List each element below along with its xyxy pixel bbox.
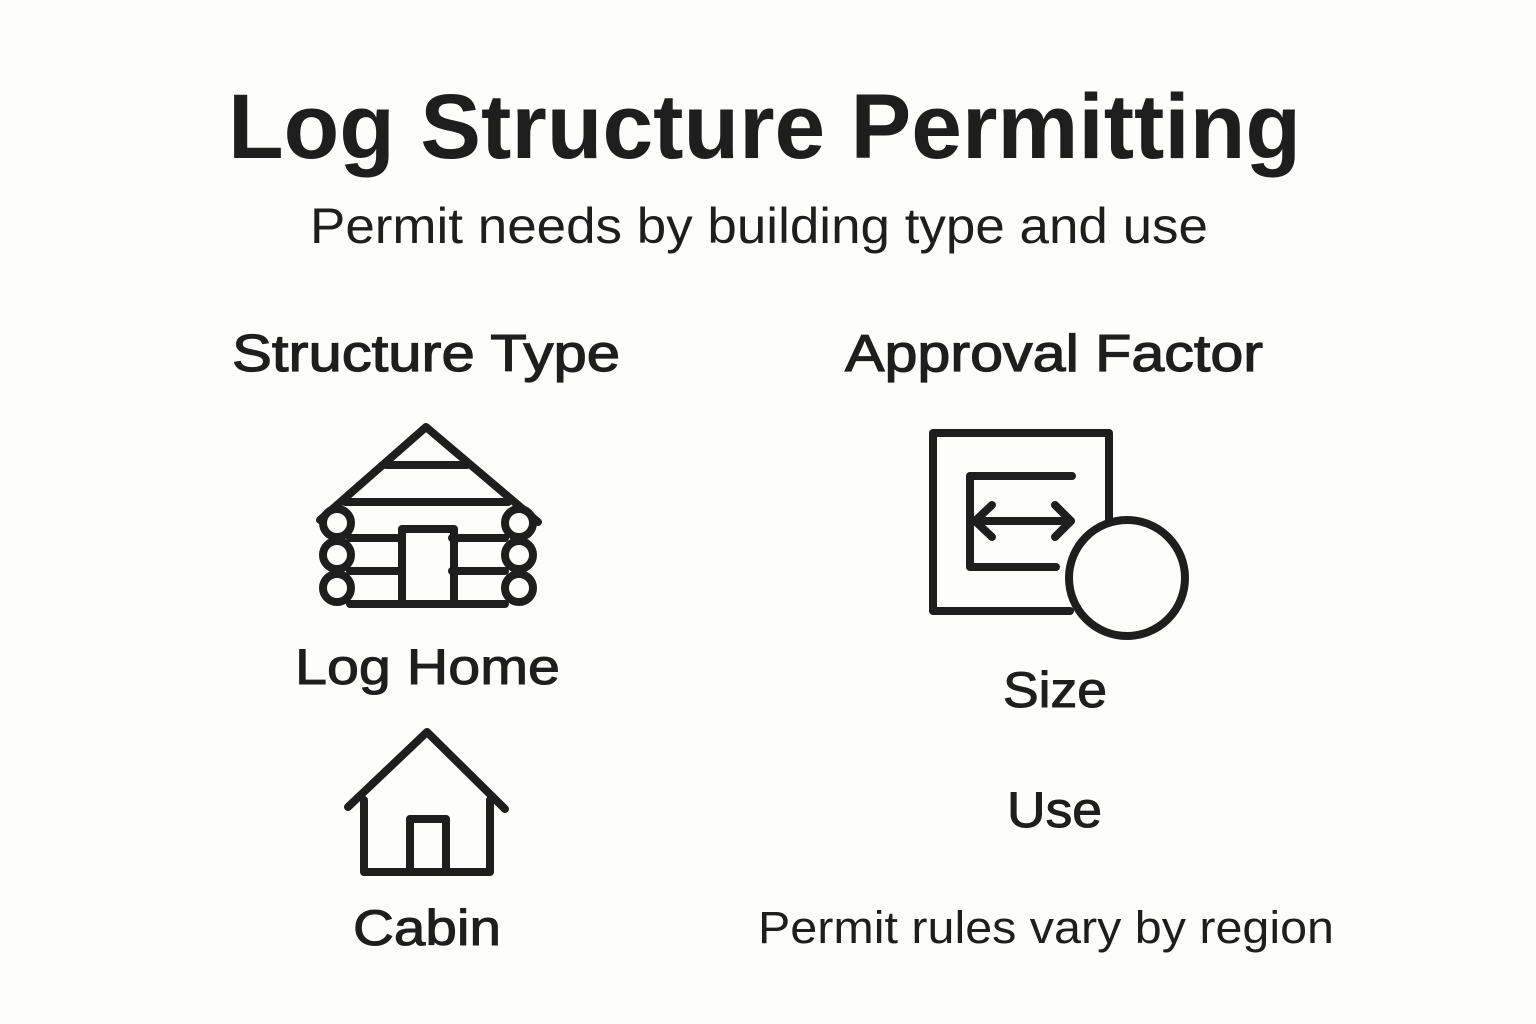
footnote: Permit rules vary by region <box>758 902 1334 953</box>
icon: log home <box>320 427 538 604</box>
subtitle: Permit needs by building type and use <box>310 198 1208 254</box>
label: use: Use <box>1007 782 1102 838</box>
label: size: Size <box>1003 662 1107 718</box>
label: log home: Log Home <box>295 639 560 695</box>
icon: size <box>933 433 1185 636</box>
label: cabin: Cabin <box>353 900 501 956</box>
icon: cabin <box>348 732 505 872</box>
title: Log Structure Permitting <box>228 76 1301 178</box>
heading: approval factor: Approval Factor <box>845 325 1263 383</box>
heading: structure type: Structure Type <box>232 325 620 383</box>
